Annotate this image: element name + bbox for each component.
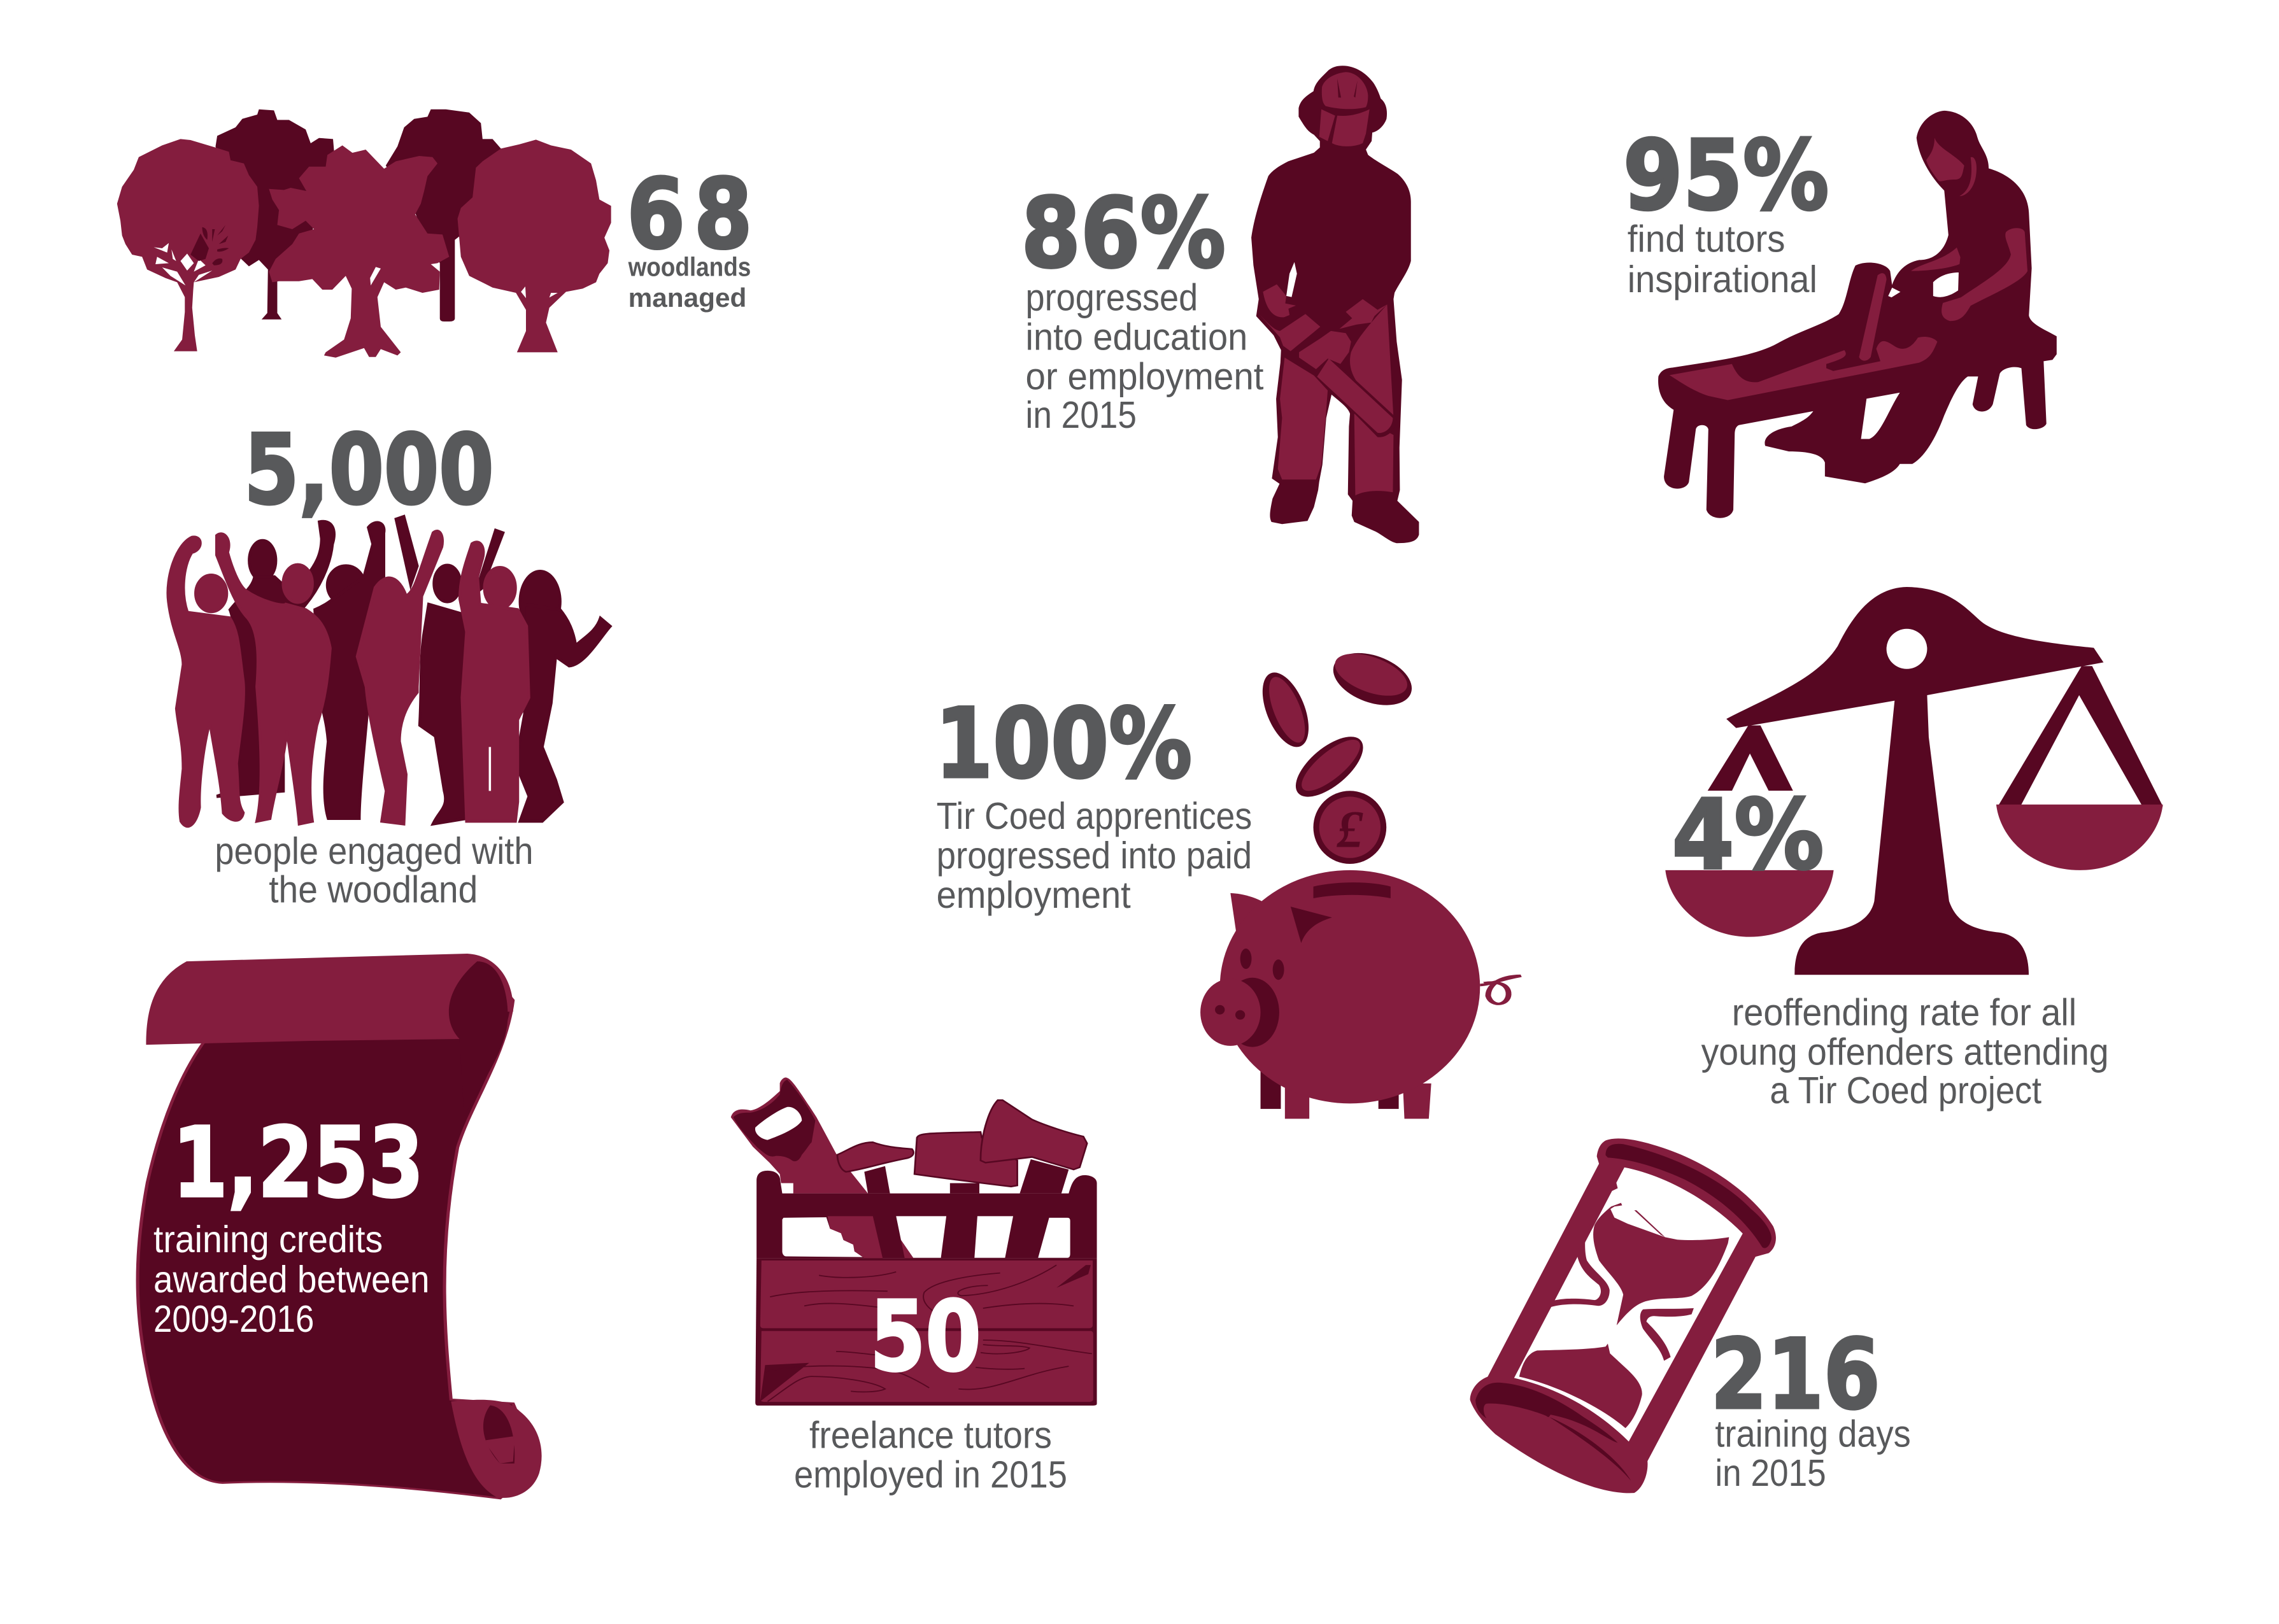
icon: falling coins xyxy=(1253,643,1419,864)
label: reoffending rate for all young offenders attending a Tir Coed project: reoffending rate for all xyxy=(1732,991,2077,1033)
panel: people engaged xyxy=(168,413,610,911)
icon: trees xyxy=(117,109,611,358)
label: training credits awarded between 2009-2016: awarded between xyxy=(153,1258,430,1301)
icon: balance scales xyxy=(1665,587,2163,975)
icon: woodworker at shaving bench xyxy=(1658,111,2057,518)
label: woodlands managed xyxy=(628,253,751,313)
label: training days in 2015: training days xyxy=(1715,1412,1911,1455)
panel: training days xyxy=(1470,1138,1911,1494)
label: find tutors inspirational xyxy=(1628,218,1817,300)
panel: tutors inspirational xyxy=(1623,111,2057,518)
label: reoffending rate for all young offenders attending a Tir Coed project xyxy=(1701,991,2109,1112)
panel: training credits xyxy=(138,954,542,1499)
label: progressed into education or employment in 2015: or employment xyxy=(1026,355,1264,397)
panel: freelance tutors xyxy=(731,1077,1097,1496)
icon: hourglass xyxy=(1470,1138,1776,1493)
icon: falling coins: £ xyxy=(1336,800,1363,859)
icon: scroll xyxy=(138,954,542,1499)
label: training days in 2015 xyxy=(1715,1412,1911,1494)
label: progressed into education or employment in 2015: into education xyxy=(1026,315,1247,358)
label: progressed into education or employment in 2015 xyxy=(1026,276,1264,436)
label: people engaged with the woodland xyxy=(215,830,533,911)
panel: reoffending rate xyxy=(1665,587,2163,1112)
panel: apprentices paid employment xyxy=(935,643,1521,1119)
label: progressed into education or employment in 2015: progressed xyxy=(1026,276,1198,318)
icon: toolbox xyxy=(731,1077,1097,1406)
stat: 86%: 86% xyxy=(1021,177,1226,290)
label: find tutors inspirational: inspirational xyxy=(1628,258,1817,300)
label: reoffending rate for all young offenders attending a Tir Coed project: young offenders attending xyxy=(1701,1030,2109,1073)
label: people engaged with the woodland: the woodland xyxy=(269,868,478,911)
label: training credits awarded between 2009-2016 xyxy=(153,1218,430,1340)
stat: 68 xyxy=(627,158,753,271)
stat: 68: 8 xyxy=(694,158,753,271)
icon: chainsaw worker xyxy=(1251,66,1419,543)
stat: 50: 50 xyxy=(870,1280,981,1393)
label: Tir Coed apprentices progressed into paid employment: employment xyxy=(937,873,1131,916)
icon: piggy bank xyxy=(1200,870,1521,1119)
stat: 5,000: 5,000 xyxy=(244,413,494,526)
label: Tir Coed apprentices progressed into paid employment: progressed into paid xyxy=(937,834,1252,877)
label: people engaged with the woodland: people engaged with xyxy=(215,830,533,872)
label: freelance tutors employed in 2015: employed in 2015 xyxy=(794,1453,1067,1496)
stat: 4%: 4% xyxy=(1672,779,1824,891)
label: training credits awarded between 2009-2016: 2009-2016 xyxy=(153,1297,314,1340)
stat: 1,253: 1,253 xyxy=(173,1106,423,1219)
stat: 216: 216 xyxy=(1710,1318,1880,1430)
label: freelance tutors employed in 2015: freelance tutors xyxy=(809,1414,1052,1457)
label: training days in 2015: in 2015 xyxy=(1715,1451,1826,1494)
icon: crowd of people xyxy=(168,516,610,826)
label: find tutors inspirational: find tutors xyxy=(1628,218,1785,260)
label: progressed into education or employment in 2015: in 2015 xyxy=(1026,393,1137,436)
label: freelance tutors employed in 2015 xyxy=(794,1414,1067,1496)
label: woodlands managed: woodlands xyxy=(628,253,751,282)
label: training credits awarded between 2009-2016: training credits xyxy=(153,1218,383,1260)
panel: progressed into education xyxy=(1021,66,1419,543)
label: Tir Coed apprentices progressed into paid employment: Tir Coed apprentices xyxy=(937,794,1252,837)
panel: woodlands managed xyxy=(117,109,753,358)
label: reoffending rate for all young offenders attending a Tir Coed project: a Tir Coed project xyxy=(1770,1069,2041,1112)
stat: 100%: 100% xyxy=(935,687,1192,800)
stat: 95%: 95% xyxy=(1623,119,1829,232)
label: Tir Coed apprentices progressed into paid employment xyxy=(937,794,1252,916)
label: woodlands managed: managed xyxy=(628,283,746,313)
stat: 68: 6 xyxy=(627,158,685,271)
